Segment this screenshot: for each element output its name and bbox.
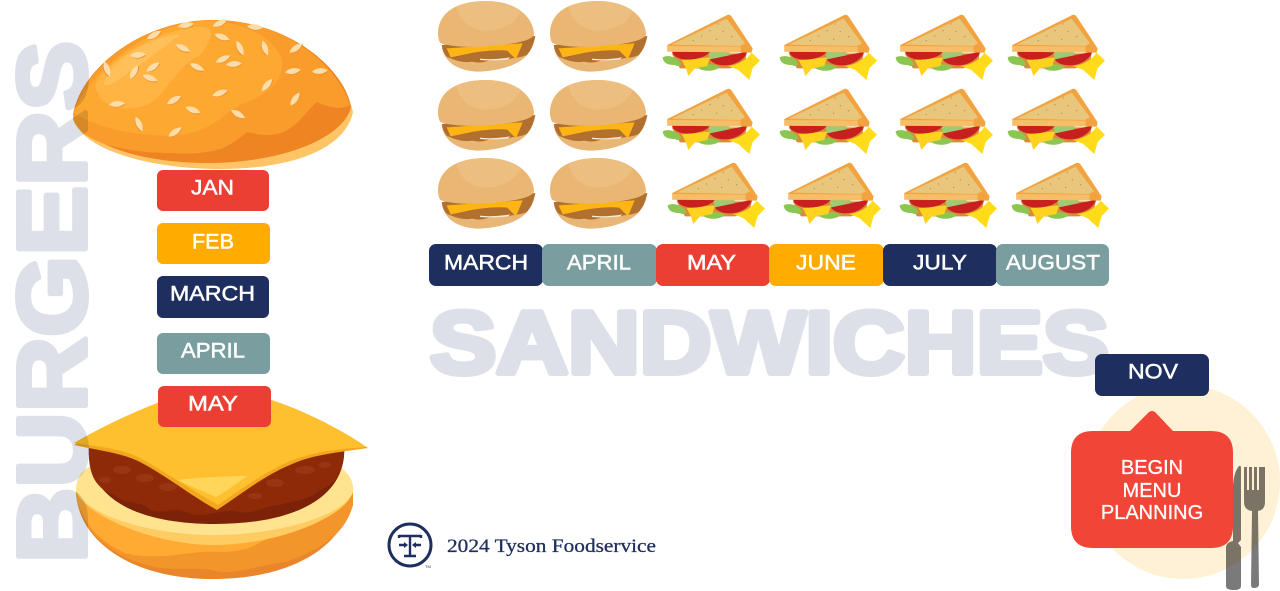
sandwich icon grid — [438, 0, 1109, 229]
logo: Tyson emblem: TM — [425, 564, 431, 569]
plate circle — [1086, 385, 1280, 579]
burger month: APRIL: APRIL — [181, 338, 245, 362]
burger month: MARCH — [157, 276, 269, 318]
callout: begin menu planning: MENU — [1123, 480, 1181, 502]
callout: begin menu planning — [1071, 411, 1233, 548]
callout: begin menu planning: BEGIN — [1121, 457, 1183, 479]
burger month: JAN: JAN — [191, 176, 234, 200]
top burger bun — [73, 17, 353, 169]
burger month: APRIL — [157, 333, 270, 374]
logo: Tyson emblem — [389, 524, 431, 569]
heading: SANDWICHES: SANDWICHES — [430, 293, 1109, 392]
sandwich month: AUGUST — [996, 244, 1109, 286]
sandwich month: JUNE — [769, 244, 884, 286]
icon: knife and fork — [1226, 466, 1265, 590]
heading: BURGERS: BURGERS — [0, 41, 106, 563]
sandwich month: JUNE: JUNE — [796, 250, 856, 274]
sandwich month: APRIL — [542, 244, 657, 286]
sandwich month: MARCH — [429, 244, 543, 286]
sandwich month: MAY: MAY — [687, 250, 736, 274]
sandwich icons — [663, 15, 1109, 228]
burger month: MARCH: MARCH — [170, 282, 255, 306]
small burger icons — [438, 0, 647, 229]
sandwich month: MARCH: MARCH — [444, 250, 528, 274]
burger month: FEB: FEB — [192, 230, 234, 254]
burger month: MAY: MAY — [188, 392, 238, 416]
sandwich month: JULY: JULY — [913, 250, 967, 274]
burger month: JAN — [157, 170, 269, 211]
sandwich month: AUGUST: AUGUST — [1006, 250, 1100, 274]
month: NOV — [1095, 354, 1209, 396]
footer: copyright text: 2024 Tyson Foodservice — [447, 536, 656, 557]
burger month: MAY — [158, 386, 271, 427]
sandwich month: MAY — [656, 244, 770, 286]
month: NOV: NOV — [1128, 360, 1179, 384]
sandwich month: APRIL: APRIL — [567, 250, 631, 274]
bottom burger with patty and cheese — [74, 387, 368, 579]
sandwich month: JULY — [883, 244, 997, 286]
burger month: FEB — [157, 223, 270, 264]
callout: begin menu planning: PLANNING — [1101, 502, 1203, 524]
